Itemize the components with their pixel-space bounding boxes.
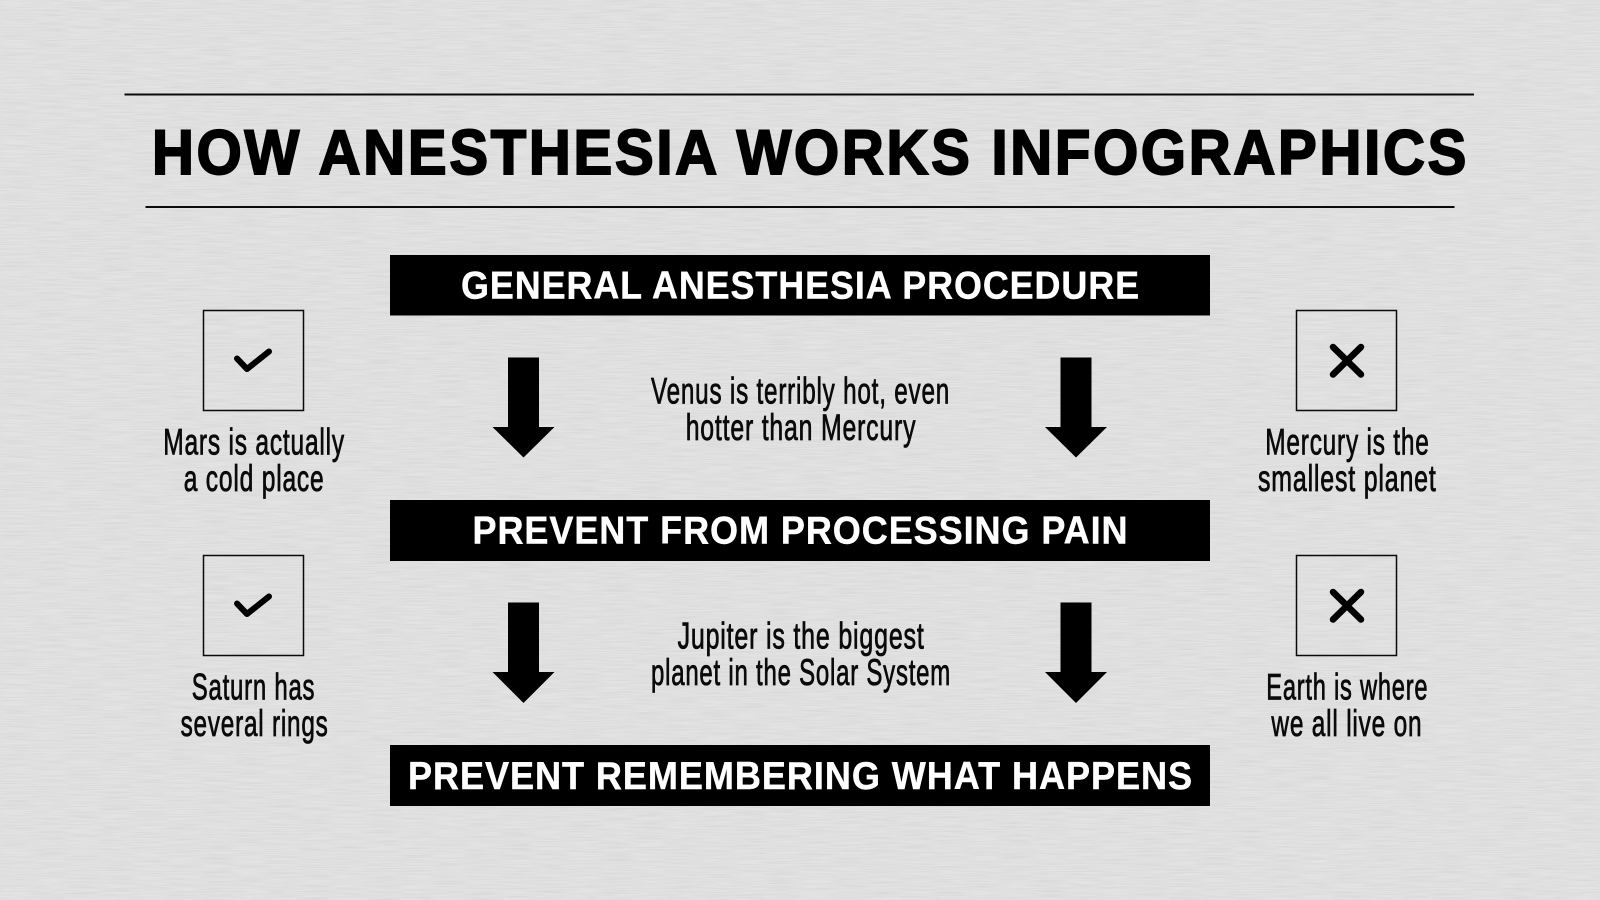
- text: Earth: we all live on: [1271, 703, 1422, 744]
- center text: Jupiter: [651, 616, 951, 693]
- arrow: lower left: [492, 602, 554, 703]
- banner: prevent from processing pain: [390, 500, 1210, 561]
- text: Mars: Mars is actually: [163, 422, 345, 462]
- banner: general anesthesia procedure: [390, 255, 1210, 316]
- icon: check box: [204, 310, 304, 410]
- title rule top: [124, 94, 1474, 96]
- center text: Venus: Venus is terribly hot, even: [651, 370, 950, 412]
- text: Mars: [163, 422, 345, 499]
- arrow: upper right: [1045, 358, 1107, 458]
- panel: Saturn check: [181, 556, 329, 744]
- arrow: upper left: [492, 358, 554, 458]
- center text: Jupiter: Jupiter is the biggest: [678, 616, 925, 656]
- text: Mercury: smallest planet: [1258, 458, 1437, 499]
- center text: Jupiter: planet in the Solar System: [651, 652, 951, 693]
- arrow: lower right: [1045, 602, 1107, 703]
- panel: Earth cross: [1266, 556, 1428, 744]
- text: Saturn: several rings: [181, 703, 329, 744]
- banner: general anesthesia procedure: GENERAL ANESTHESIA PROCEDURE: [461, 264, 1140, 308]
- icon: cross box: [1296, 310, 1396, 410]
- panel: Mars check: [163, 310, 345, 499]
- banner: prevent from processing pain: PREVENT FROM PROCESSING PAIN: [472, 510, 1128, 552]
- text: Saturn: [181, 666, 329, 744]
- text: Saturn: Saturn has: [192, 666, 315, 708]
- panel: Mercury cross: [1258, 310, 1437, 499]
- title rule bottom: [146, 206, 1454, 208]
- text: Earth: Earth is where: [1266, 666, 1428, 708]
- text: Mercury: [1258, 422, 1437, 499]
- text: Mars: a cold place: [184, 458, 324, 499]
- text: Mercury: Mercury is the: [1265, 422, 1430, 462]
- banner: prevent remembering what happens: PREVENT REMEMBERING WHAT HAPPENS: [408, 755, 1193, 798]
- center text: Venus: [651, 370, 950, 448]
- center text: Venus: hotter than Mercury: [686, 407, 916, 448]
- title: HOW ANESTHESIA WORKS INFOGRAPHICS: [152, 118, 1469, 188]
- icon: check box: [204, 556, 304, 656]
- icon: cross box: [1296, 556, 1396, 656]
- text: Earth: [1266, 666, 1428, 744]
- banner: prevent remembering what happens: [390, 745, 1210, 806]
